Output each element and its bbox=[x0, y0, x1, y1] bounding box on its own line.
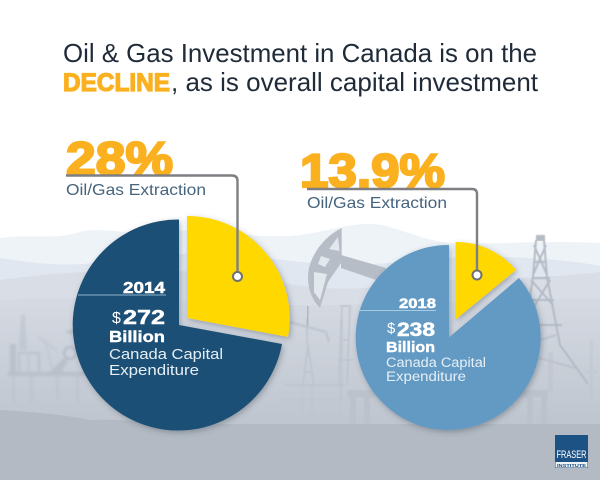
logo: Fraser Institute bbox=[555, 435, 588, 469]
connector line bbox=[66, 176, 238, 272]
background: ground band bbox=[0, 410, 600, 480]
title highlighted word: DECLINE bbox=[63, 69, 170, 97]
description: Canada Capital Expenditure: Expenditure bbox=[109, 362, 199, 379]
logo: Fraser Institute: INSTITUTE bbox=[557, 463, 587, 469]
2018 pie chart bbox=[356, 242, 541, 430]
description: Canada Capital Expenditure: Expenditure bbox=[386, 369, 466, 384]
background: centre oil derricks bbox=[280, 306, 353, 420]
year label 2018: 2018 bbox=[399, 295, 436, 311]
2018 pie chart: 238 bbox=[397, 320, 435, 341]
label: Oil/Gas Extraction bbox=[66, 182, 206, 199]
description: Canada Capital Expenditure: Canada Capital bbox=[386, 355, 486, 370]
connector line bbox=[307, 189, 477, 270]
2014 pie chart: 272 bbox=[123, 306, 165, 329]
amount $272 Billion: $ bbox=[112, 310, 121, 327]
callout: 28% oil and gas extraction bbox=[66, 132, 242, 281]
background: right drilling rig bbox=[500, 236, 588, 385]
title bbox=[63, 38, 539, 97]
description: Canada Capital Expenditure: Canada Capital bbox=[109, 346, 223, 363]
title: Oil & Gas Investment in Canada is on the bbox=[63, 38, 537, 68]
pie slice: rest of capital expenditure 2018 bbox=[356, 245, 541, 430]
2014 pie chart bbox=[73, 216, 290, 430]
background: far left oil platform bbox=[8, 315, 86, 402]
year label 2014: 2014 bbox=[123, 280, 165, 297]
big number 13.9%: 13.9% bbox=[300, 144, 445, 197]
big number 28%: 28% bbox=[66, 132, 173, 185]
amount $238 Billion: $ bbox=[387, 320, 396, 337]
2018 pie chart: Billion bbox=[386, 340, 435, 356]
description: Canada Capital Expenditure bbox=[109, 346, 223, 379]
2014 pie chart: Billion bbox=[109, 329, 165, 346]
pie slice: oil and gas 13.9% bbox=[456, 242, 516, 320]
callout: 13.9% oil and gas extraction bbox=[300, 144, 482, 280]
description: Canada Capital Expenditure bbox=[386, 355, 486, 384]
title: , as is overall capital investment bbox=[171, 67, 539, 97]
logo: Fraser Institute: FRASER bbox=[556, 449, 587, 461]
label: Oil/Gas Extraction bbox=[307, 195, 447, 212]
pie slice: oil and gas 28% bbox=[187, 216, 290, 337]
background: pumpjack bbox=[307, 228, 386, 326]
pie slice: rest of capital expenditure 2014 bbox=[73, 219, 282, 430]
background: mountain landscape bbox=[0, 224, 600, 480]
background: drilling platform below pies bbox=[340, 320, 597, 424]
